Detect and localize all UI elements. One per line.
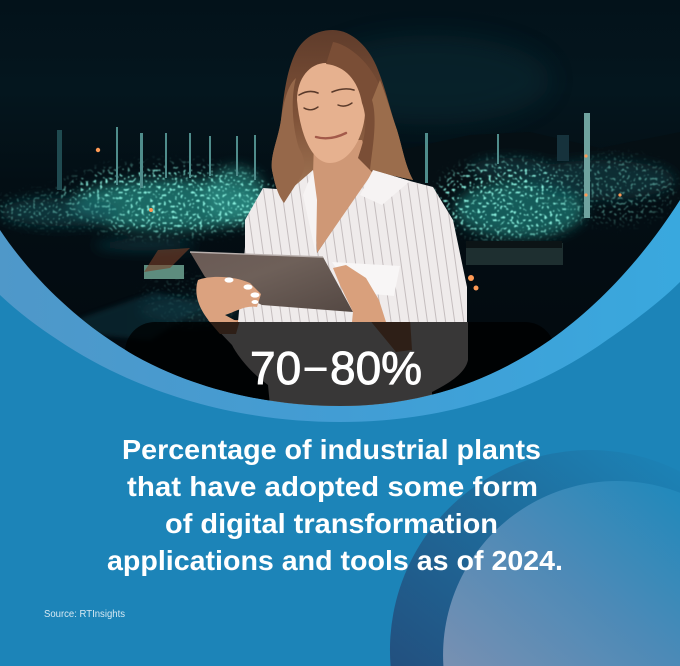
line 1: Percentage of industrial plants — [122, 434, 541, 465]
light blue swoosh band — [0, 190, 680, 422]
decorative circles: bottom right — [390, 450, 680, 666]
line 4: applications and tools as of 2024. — [107, 545, 563, 576]
eyes and mouth — [299, 89, 354, 138]
hair back — [272, 30, 413, 203]
description text — [107, 434, 563, 576]
tablet — [190, 252, 353, 312]
chimneys — [57, 113, 590, 218]
sky teal glow — [366, 41, 537, 119]
shirt — [238, 170, 467, 322]
statistic: 70-80%: 80% — [330, 342, 422, 394]
statistic: 70-80%: – — [305, 346, 327, 388]
right hand — [333, 265, 386, 322]
line 2: that have adopted some form — [127, 471, 538, 502]
forearms below the tablet — [208, 318, 412, 352]
photo: woman with tablet in front of refinery at night — [0, 0, 680, 410]
source note: Source: RTInsights — [44, 609, 125, 620]
factory buildings — [75, 241, 563, 340]
statistic: 70-80%: 70 — [250, 342, 301, 394]
hair lock right over shoulder — [370, 80, 413, 180]
hair lock left over shoulder — [272, 78, 300, 203]
dark blue circle — [390, 450, 680, 666]
hair over forehead — [326, 42, 376, 172]
refinery lights — [0, 150, 680, 322]
warm lights — [96, 148, 622, 290]
refinery glow: right — [455, 158, 675, 238]
lower body, dimmed by overlay — [210, 322, 468, 406]
left hand — [196, 277, 261, 322]
breast pocket — [332, 262, 400, 296]
line 3: of digital transformation — [165, 508, 498, 539]
refinery glow: left — [0, 167, 270, 322]
overlay band — [125, 322, 555, 410]
light translucent circle — [443, 481, 680, 666]
face — [297, 63, 365, 163]
woman — [125, 30, 555, 410]
tablet edge — [190, 252, 323, 257]
collar — [308, 170, 410, 246]
distant hills — [400, 132, 680, 200]
night sky — [0, 0, 680, 410]
left hand nails — [224, 277, 260, 304]
neck and chest — [313, 140, 373, 253]
